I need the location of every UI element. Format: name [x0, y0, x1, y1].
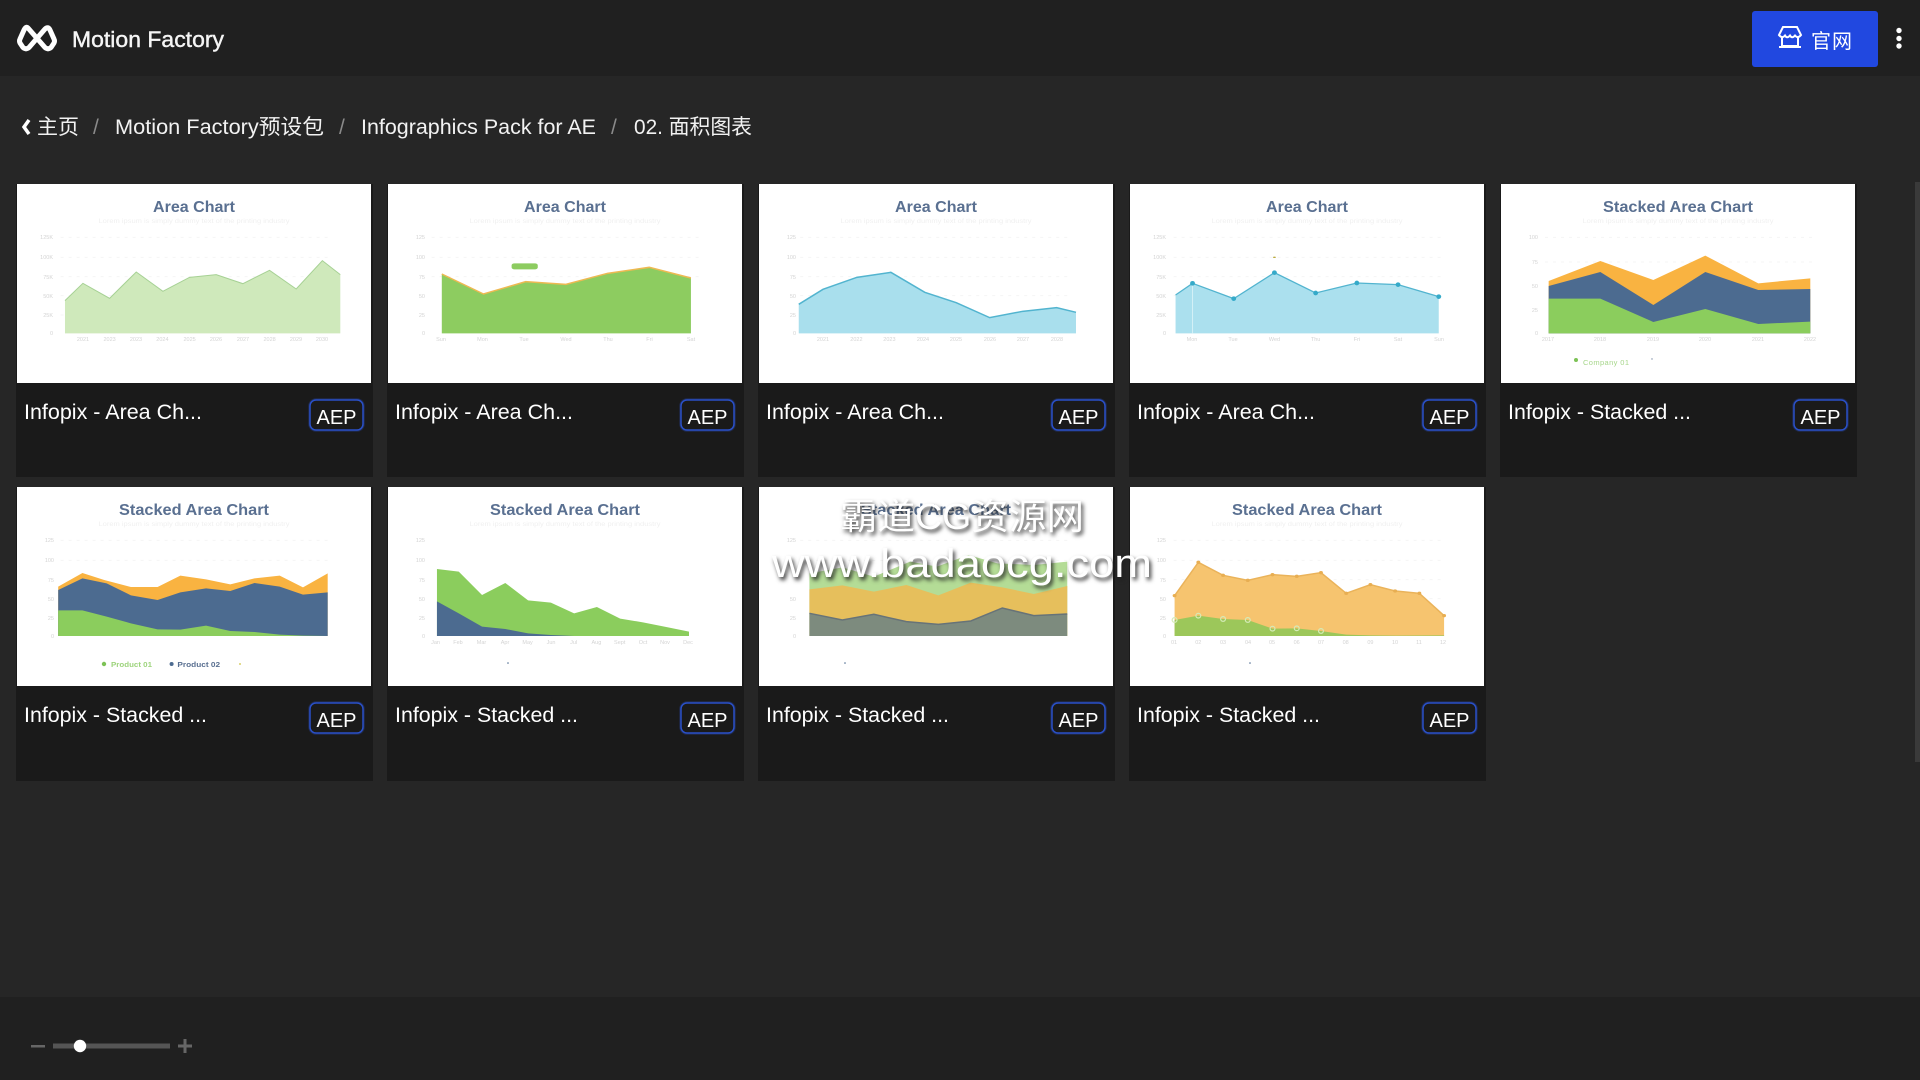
card name: Infopix - Stacked ... [24, 704, 207, 727]
watermark url: www.badaocg.com [771, 542, 1152, 586]
axis labels: 100 [416, 255, 425, 261]
axis labels: 2023 [130, 337, 142, 343]
chart title: Area Chart [895, 199, 978, 216]
card: stacked area chart orange with markers [1129, 487, 1486, 781]
card: stacked area chart company [1500, 184, 1857, 477]
axis labels: 2026 [210, 337, 222, 343]
axis labels: Wed [560, 337, 572, 343]
axis labels: 75 [790, 275, 796, 281]
axis labels: 0 [51, 634, 54, 640]
axis labels: 2028 [1051, 337, 1063, 343]
chart title: Area Chart [1266, 199, 1349, 216]
stacked area chart [437, 569, 689, 636]
axis labels [1157, 538, 1446, 646]
axis labels: Oct [639, 640, 648, 646]
card name: Infopix - Area Ch... [395, 401, 573, 424]
brand name: Motion Factory [72, 27, 224, 52]
axis labels: 25 [790, 313, 796, 319]
axis labels: 100K [40, 255, 53, 261]
axis labels: Fri [1354, 337, 1360, 343]
icon: minus [31, 1045, 45, 1048]
thumbnail [759, 184, 1113, 383]
AEP badge [1423, 400, 1476, 430]
axis labels: 06 [1294, 640, 1300, 646]
crumb: presets: Motion Factory预设包 [115, 116, 324, 139]
axis labels: Thu [1311, 337, 1320, 343]
AEP badge [310, 703, 363, 733]
legend dot [844, 662, 846, 664]
axis labels: 2021 [1752, 337, 1764, 343]
axis labels: 100 [45, 558, 54, 564]
axis labels: 0 [1535, 331, 1538, 337]
axis labels: Nov [660, 640, 670, 646]
AEP badge: AEP [687, 407, 728, 429]
axis labels: 2030 [316, 337, 328, 343]
axis labels: 25 [1532, 308, 1538, 314]
axis labels: 2025 [183, 337, 196, 343]
chart title: Stacked Area Chart [1232, 502, 1383, 519]
AEP badge [681, 703, 734, 733]
axis labels [45, 538, 54, 640]
icon: more menu [1896, 28, 1902, 49]
thumbnail [1501, 184, 1855, 383]
AEP badge: AEP [1058, 710, 1099, 732]
axis labels: 2023 [883, 337, 896, 343]
thumbnail [17, 487, 371, 686]
stacked area chart [1172, 540, 1446, 636]
axis labels: 50 [1160, 597, 1166, 603]
axis labels: 2029 [290, 337, 302, 343]
thumbnail [759, 487, 1113, 686]
axis labels: 07 [1318, 640, 1324, 646]
chart subtitle: Lorem ipsum is simply dummy text of the printing industry [98, 219, 290, 225]
axis labels: 2024 [917, 337, 929, 343]
axis labels [787, 235, 1063, 343]
axis labels: Sun [1434, 337, 1444, 343]
thumbnail [388, 184, 742, 383]
chart title: Stacked Area Chart [119, 502, 270, 519]
card name: Infopix - Area Ch... [1137, 401, 1315, 424]
axis labels: 2024 [156, 337, 169, 343]
axis labels: 75 [419, 275, 425, 281]
axis labels: 75K [1156, 275, 1166, 281]
card: area chart blue smooth [758, 184, 1115, 477]
axis labels: 125 [787, 235, 796, 241]
axis labels: 08 [1343, 640, 1349, 646]
axis labels: 2019 [1647, 337, 1659, 343]
axis labels: Wed [1269, 337, 1280, 343]
axis labels: 0 [422, 331, 425, 337]
legend: Product 01 [111, 660, 152, 669]
axis labels: 75 [1532, 260, 1538, 266]
stacked area chart [58, 540, 330, 636]
axis labels: May [522, 640, 533, 646]
axis labels: 2017 [1542, 337, 1554, 343]
axis labels: Mar [477, 640, 486, 646]
axis labels: 2027 [1017, 337, 1029, 343]
axis labels: 25 [419, 313, 425, 319]
chart subtitle: Lorem ipsum is simply dummy text of the printing industry [1582, 219, 1774, 225]
slider track [53, 1044, 170, 1048]
card name: Infopix - Stacked ... [766, 704, 949, 727]
axis labels: 50 [790, 294, 796, 300]
card: stacked area chart declining [387, 487, 744, 781]
slider knob [74, 1040, 86, 1052]
axis labels: 2020 [1699, 337, 1711, 343]
crumb: home: 主页 [37, 116, 79, 139]
axis labels: 12 [1440, 640, 1446, 646]
card: stacked area chart product [16, 487, 373, 781]
axis labels: 50 [1532, 284, 1538, 290]
button label: 官网 [1811, 30, 1852, 53]
axis labels: 11 [1416, 640, 1422, 646]
axis labels: 0 [422, 634, 425, 640]
axis labels: 2027 [237, 337, 249, 343]
axis labels: Feb [453, 640, 463, 646]
axis labels [787, 538, 796, 640]
card name: Infopix - Area Ch... [766, 401, 944, 424]
axis labels: 0 [1163, 331, 1166, 337]
axis labels: 2022 [850, 337, 863, 343]
axis labels: 25 [48, 616, 54, 622]
watermark [771, 496, 1152, 586]
axis labels: 05 [1269, 640, 1275, 646]
AEP badge [1052, 703, 1105, 733]
axis labels: 0 [793, 634, 796, 640]
icon: Motion Factory logo [20, 27, 54, 49]
axis labels: 0 [50, 331, 53, 337]
axis labels [40, 235, 328, 343]
axis labels: Thu [603, 337, 613, 343]
AEP badge: AEP [316, 407, 357, 429]
chart title: Stacked Area Chart [861, 502, 1012, 519]
axis labels: Apr [501, 640, 509, 646]
axis labels: 25K [43, 313, 53, 319]
axis labels: 125 [45, 538, 54, 544]
card: stacked area chart translucent [758, 487, 1115, 781]
thumbnail [1130, 184, 1484, 383]
axis labels: Sat [687, 337, 696, 343]
axis labels: 125 [787, 538, 796, 544]
card name: Infopix - Stacked ... [1508, 401, 1691, 424]
axis labels: 100 [787, 255, 796, 261]
axis labels: Jan [431, 640, 440, 646]
chart subtitle: Lorem ipsum is simply dummy text of the printing industry [840, 219, 1032, 225]
legend [1574, 358, 1653, 367]
axis labels: Tue [519, 337, 529, 343]
card name: Infopix - Stacked ... [395, 704, 578, 727]
axis labels: Sun [436, 337, 446, 343]
axis labels: 2018 [1594, 337, 1606, 343]
axis labels: 01 [1171, 640, 1177, 646]
AEP badge: AEP [1058, 407, 1099, 429]
axis labels: 0 [793, 331, 796, 337]
axis labels: 50K [1156, 294, 1166, 300]
AEP badge [1052, 400, 1105, 430]
axis labels: 2021 [817, 337, 829, 343]
AEP badge: AEP [1429, 710, 1470, 732]
AEP badge: AEP [687, 710, 728, 732]
axis labels: Jun [547, 640, 555, 646]
axis labels: 100K [1153, 255, 1166, 261]
icon: back chevron [24, 120, 29, 134]
axis labels: 2026 [984, 337, 996, 343]
axis labels: Mon [1187, 337, 1197, 343]
legend dot [1249, 662, 1251, 664]
AEP badge: AEP [316, 710, 357, 732]
thumbnail [388, 487, 742, 686]
axis labels: 02 [1195, 640, 1201, 646]
chart subtitle: Lorem ipsum is simply dummy text of the printing industry [470, 219, 660, 225]
chart subtitle: Lorem ipsum is simply dummy text of the printing industry [1212, 522, 1402, 528]
axis labels: 0 [1163, 634, 1166, 640]
footer with zoom slider [0, 997, 1920, 1080]
AEP badge [1794, 400, 1847, 430]
axis labels: 2025 [950, 337, 962, 343]
area chart [799, 237, 1076, 333]
axis labels: 100 [1157, 558, 1166, 564]
chart subtitle: Lorem ipsum is simply dummy text of the printing industry [1212, 219, 1402, 225]
axis labels: 2028 [263, 337, 276, 343]
AEP badge [681, 400, 734, 430]
header bar [0, 0, 1920, 76]
chart subtitle: Lorem ipsum is simply dummy text of the printing industry [98, 522, 290, 528]
chart subtitle: Lorem ipsum is simply dummy text of the printing industry [470, 522, 660, 528]
axis labels: 2021 [77, 337, 89, 343]
axis labels: 25 [419, 616, 425, 622]
card: area chart blue with markers [1129, 184, 1486, 477]
axis labels: 125K [40, 235, 53, 241]
stacked area chart [1545, 237, 1814, 333]
axis labels: 50 [419, 597, 425, 603]
axis labels: 09 [1367, 640, 1373, 646]
axis labels: 50 [419, 294, 425, 300]
separator: / [339, 116, 345, 139]
chart title: Stacked Area Chart [1603, 199, 1754, 216]
area chart [432, 237, 701, 333]
axis labels: Dec [683, 640, 693, 646]
scrollbar [1915, 182, 1920, 762]
axis labels: 125K [1153, 235, 1166, 241]
separator: / [93, 116, 99, 139]
axis labels: Mon [477, 337, 488, 343]
axis labels [416, 235, 696, 343]
stacked area chart [800, 540, 1072, 636]
axis labels: Jul [570, 640, 577, 646]
thumbnail [1130, 487, 1484, 686]
axis labels: 75K [43, 275, 53, 281]
icon: store [1779, 27, 1801, 47]
crumb: pack: Infographics Pack for AE [361, 116, 596, 139]
chart title: Area Chart [153, 199, 236, 216]
axis labels: 100 [416, 558, 425, 564]
official site button [1752, 11, 1878, 67]
axis labels: 125 [1157, 538, 1166, 544]
axis labels: 50 [48, 597, 54, 603]
axis labels: Sept [614, 640, 626, 646]
card name: Infopix - Stacked ... [1137, 704, 1320, 727]
axis labels: 2023 [103, 337, 116, 343]
thumbnail [17, 184, 371, 383]
axis labels: 75 [48, 578, 54, 584]
axis labels [1153, 235, 1444, 343]
area chart [61, 237, 340, 333]
axis labels: 25 [790, 616, 796, 622]
legend: Company 01 [1583, 358, 1629, 367]
separator: / [611, 116, 617, 139]
icon: plus [178, 1039, 192, 1053]
crumb: current: 02. 面积图表 [634, 116, 752, 139]
axis labels: 2022 [1804, 337, 1816, 343]
axis labels: 100 [1529, 235, 1538, 241]
axis labels: Tue [1228, 337, 1238, 343]
axis labels: 03 [1220, 640, 1226, 646]
axis labels: 10 [1392, 640, 1398, 646]
axis labels: 25K [1156, 313, 1166, 319]
axis labels: Fri [646, 337, 653, 343]
legend [102, 660, 241, 669]
chart title: Stacked Area Chart [490, 502, 641, 519]
axis labels: 75 [419, 578, 425, 584]
axis labels [416, 538, 693, 646]
axis labels: Sat [1394, 337, 1403, 343]
AEP badge [1423, 703, 1476, 733]
card: area chart green light [16, 184, 373, 477]
area chart [1174, 237, 1443, 333]
watermark name: 霸道CG资源网 [840, 496, 1084, 537]
card name: Infopix - Area Ch... [24, 401, 202, 424]
axis labels: 50 [790, 597, 796, 603]
AEP badge [310, 400, 363, 430]
axis labels: 125 [416, 538, 425, 544]
axis labels: 25 [1160, 616, 1166, 622]
axis labels: 75 [1160, 578, 1166, 584]
AEP badge: AEP [1429, 407, 1470, 429]
axis labels: 50K [43, 294, 53, 300]
axis labels: Aug [592, 640, 601, 646]
legend: Product 02 [177, 660, 220, 669]
AEP badge: AEP [1800, 407, 1841, 429]
breadcrumb [24, 116, 752, 139]
axis labels: 04 [1245, 640, 1251, 646]
chart title: Area Chart [524, 199, 607, 216]
legend dot [507, 662, 509, 664]
axis labels: 125 [416, 235, 425, 241]
axis labels [1529, 235, 1816, 343]
card: area chart green solid [387, 184, 744, 477]
